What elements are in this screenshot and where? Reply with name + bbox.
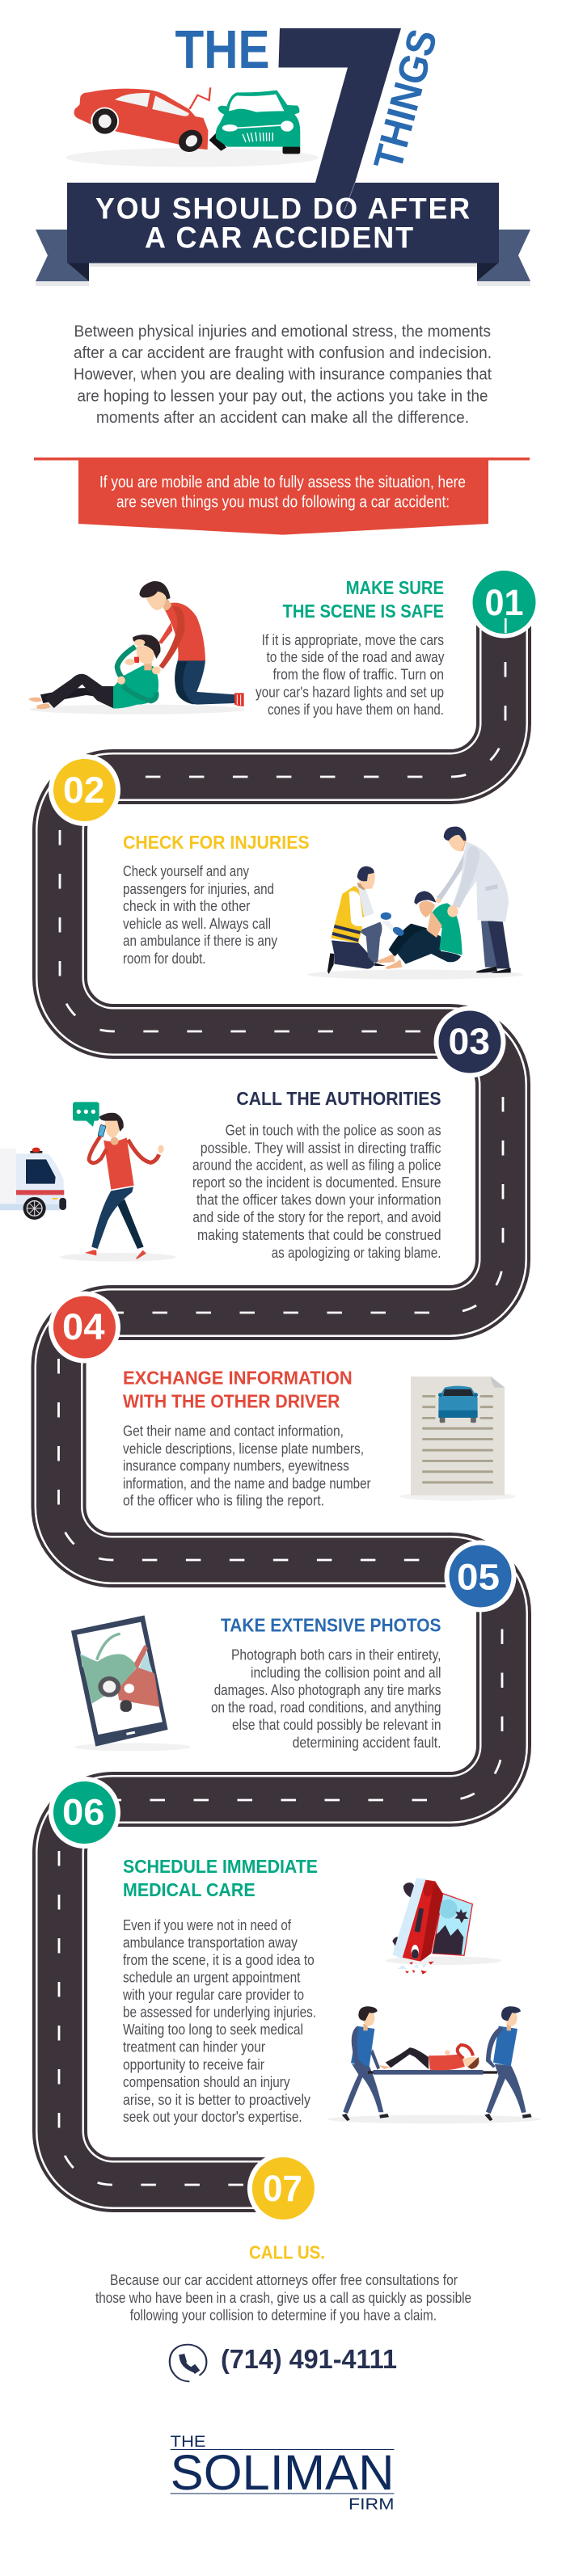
panel: step 5 take extensive photos	[71, 1614, 441, 1751]
heading: TAKE EXTENSIVE PHOTOS	[221, 1614, 441, 1635]
subtitle: A CAR ACCIDENT	[145, 221, 415, 255]
body text: with your regular care provider to	[122, 1987, 304, 2003]
step 3 badge	[433, 1006, 506, 1078]
body text: else that could possibly be relevant in	[232, 1717, 441, 1733]
body text: and side of the story for the report, and avoid	[192, 1209, 441, 1225]
illustration: paramedic and doctor with patient	[307, 827, 523, 980]
intro paragraph: Between physical injuries and emotional stress, the moments	[74, 323, 491, 341]
body text: on the road, road conditions, and anything	[211, 1700, 441, 1716]
body text: check in with the other	[123, 898, 250, 914]
step 7 badge: 07	[263, 2168, 302, 2209]
logo: the soliman firm: SOLIMAN	[171, 2445, 394, 2500]
body text: be assessed for underlying injuries.	[123, 2005, 316, 2021]
illustration: man helping injured person	[28, 581, 245, 715]
body text: following your collision to determine if you have a claim.	[130, 2307, 437, 2323]
body text: making statements that could be construed	[197, 1227, 441, 1243]
logo: the soliman firm	[171, 2433, 394, 2514]
phone number: (714) 491-4111	[221, 2344, 397, 2374]
heading: THE SCENE IS SAFE	[283, 601, 444, 622]
body text: arise, so it is better to proactively	[123, 2092, 310, 2108]
step 1 badge: 01	[485, 582, 524, 623]
body text: treatment can hinder your	[123, 2039, 265, 2055]
body text: including the collision point and all	[251, 1665, 441, 1681]
heading: CALL THE AUTHORITIES	[236, 1088, 441, 1109]
title word: THINGS: THINGS	[365, 24, 446, 175]
illustration: two men carrying stretcher	[327, 2006, 540, 2123]
body text: vehicle as well. Always call	[123, 916, 271, 932]
logo: the soliman firm: THE	[171, 2433, 205, 2451]
winding road	[58, 606, 505, 2185]
illustration: ambulance	[0, 1148, 66, 1220]
body text: those who have been in a crash, give us a call as quickly as possible	[95, 2290, 471, 2306]
body text: around the accident, as well as filing a police	[192, 1157, 441, 1174]
body text: Get in touch with the police as soon as	[226, 1122, 441, 1138]
body text	[256, 632, 445, 718]
big numeral seven	[278, 28, 401, 183]
red callout banner: are seven things you must do following a car accident:	[116, 493, 450, 511]
body text	[95, 2272, 471, 2323]
step 5 badge	[445, 1541, 516, 1612]
header: title block	[36, 19, 530, 286]
step 6 badge: 06	[62, 1792, 105, 1833]
intro paragraph	[74, 323, 492, 427]
body text: opportunity to receive fair	[123, 2057, 264, 2073]
step 5 badge: 05	[457, 1557, 500, 1598]
logo: the soliman firm: FIRM	[348, 2496, 395, 2514]
body text: passengers for injuries, and	[123, 881, 274, 897]
step 1 badge	[468, 566, 540, 639]
panel: step 3 call the authorities	[0, 1088, 441, 1262]
body text: of the officer who is filing the report.	[123, 1493, 324, 1509]
body text	[123, 1423, 371, 1509]
body text: Photograph both cars in their entirety,	[231, 1647, 441, 1663]
red callout banner	[34, 457, 530, 535]
intro paragraph: after a car accident are fraught with confusion and indecision.	[74, 344, 492, 362]
body text: from the flow of traffic. Turn on	[273, 667, 444, 683]
body text: schedule an urgent appointment	[123, 1969, 300, 1985]
body text: to the side of the road and away	[267, 649, 445, 665]
ribbon banner	[36, 183, 530, 286]
body text: report so the incident is documented. Ensure	[192, 1174, 441, 1191]
body text: ambulance transportation away	[123, 1934, 298, 1950]
heading	[283, 577, 444, 622]
step 4 badge: 04	[62, 1306, 105, 1347]
body text	[211, 1647, 441, 1751]
body text: information, and the name and badge number	[123, 1476, 371, 1492]
red callout banner: If you are mobile and able to fully assess the situation, here	[99, 474, 466, 491]
intro paragraph: are hoping to lessen your pay out, the actions you take in the	[78, 386, 488, 405]
heading	[123, 1368, 353, 1411]
illustration: man on phone	[60, 1102, 176, 1262]
heading: MEDICAL CARE	[123, 1879, 256, 1900]
step 2 badge: 02	[63, 769, 105, 811]
body text: Because our car accident attorneys offer free consultations for	[110, 2272, 458, 2288]
call to action	[95, 2242, 471, 2381]
illustration: overturned car	[386, 1878, 501, 1975]
intro paragraph: However, when you are dealing with insurance companies that	[74, 365, 492, 384]
body text: determining accident fault.	[293, 1735, 441, 1751]
panel: step 6 schedule immediate medical care	[122, 1856, 540, 2125]
heading: EXCHANGE INFORMATION	[123, 1368, 353, 1389]
body text: If it is appropriate, move the cars	[262, 632, 444, 648]
heading: WITH THE OTHER DRIVER	[123, 1390, 340, 1411]
icon: phone	[170, 2345, 206, 2381]
body text: from the scene, it is a good idea to	[123, 1952, 315, 1968]
heading: SCHEDULE IMMEDIATE	[123, 1856, 318, 1877]
illustration: tablet photographing crash	[71, 1616, 191, 1751]
step 7 badge	[247, 2152, 319, 2224]
subtitle	[95, 183, 471, 255]
body text	[122, 1917, 316, 2125]
body text: Even if you were not in need of	[123, 1917, 292, 1933]
illustration: report document with car	[400, 1377, 515, 1501]
body text: Get their name and contact information,	[123, 1423, 344, 1439]
panel: step 2 check for injuries	[123, 827, 523, 980]
step 2 badge	[49, 754, 120, 826]
intro paragraph: moments after an accident can make all the difference.	[96, 408, 469, 427]
title word: THE: THE	[175, 19, 270, 80]
body text: Check yourself and any	[123, 863, 249, 879]
body text: seek out your doctor's expertise.	[123, 2109, 302, 2125]
step 3 badge: 03	[448, 1021, 490, 1062]
panel: step 4 exchange information	[123, 1368, 515, 1509]
subtitle: YOU SHOULD DO AFTER	[95, 192, 471, 226]
body text: compensation should an injury	[123, 2074, 289, 2090]
body text: room for doubt.	[123, 951, 205, 967]
panel: step 1 make sure the scene is safe	[28, 577, 444, 718]
step 4 badge	[49, 1292, 120, 1363]
step 6 badge	[49, 1777, 120, 1849]
body text: as apologizing or taking blame.	[272, 1245, 441, 1261]
heading: CALL US.	[249, 2242, 325, 2263]
heading: MAKE SURE	[346, 577, 444, 598]
heading: CHECK FOR INJURIES	[123, 832, 310, 853]
body text: vehicle descriptions, license plate numbers,	[123, 1440, 364, 1457]
body text: cones if you have them on hand.	[268, 702, 444, 718]
body text: that the officer takes down your information	[196, 1192, 441, 1208]
body text: an ambulance if there is any	[123, 933, 277, 949]
body text	[192, 1122, 441, 1261]
body text	[123, 863, 277, 967]
body text: Waiting too long to seek medical	[123, 2022, 303, 2038]
body text: damages. Also photograph any tire marks	[214, 1682, 441, 1698]
heading	[123, 1856, 318, 1900]
body text: insurance company numbers, eyewitness	[123, 1458, 349, 1474]
body text: your car's hazard lights and set up	[256, 685, 444, 701]
illustration: two cars colliding	[66, 87, 319, 167]
body text: possible. They will assist in directing traffic	[201, 1140, 441, 1156]
